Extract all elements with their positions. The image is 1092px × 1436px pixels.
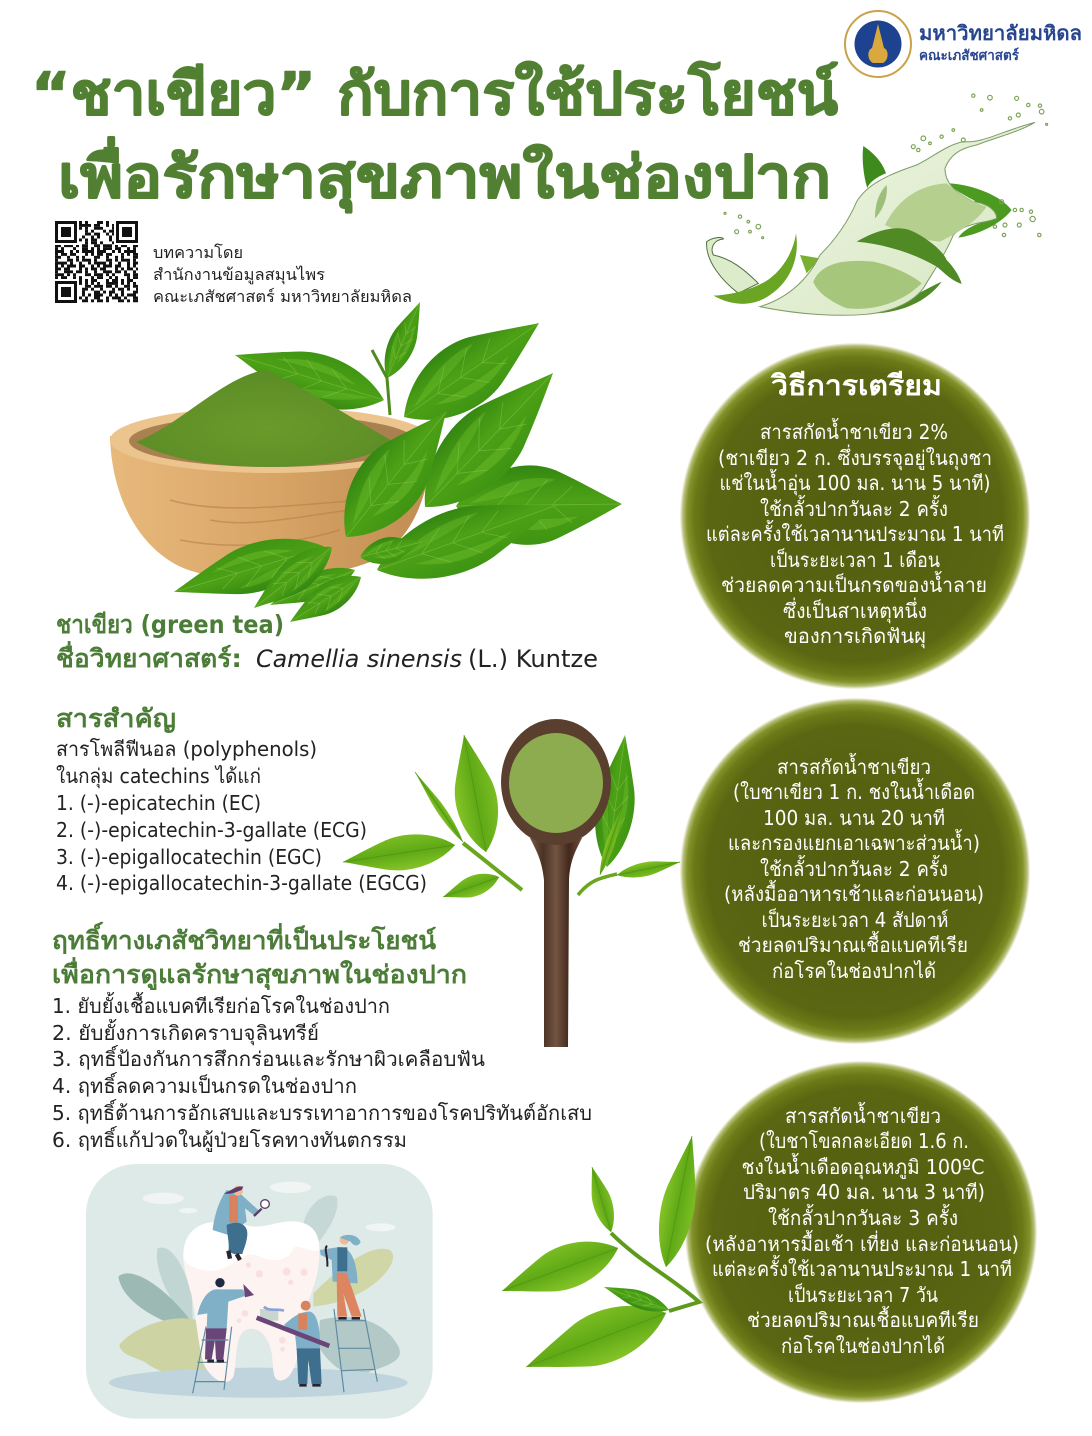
panel: preparation method 2 — [680, 698, 1030, 1044]
dentist on right ladder — [320, 1235, 377, 1392]
article credit — [153, 243, 412, 306]
benefits list: 3. ฤทธิ์ป้องกันการสึกกร่อนและรักษาผิวเคลือบฟัน — [52, 1044, 485, 1071]
plant name — [56, 610, 598, 673]
tooth — [183, 1221, 319, 1382]
panel: preparation method 1: ใช้กลั้วปากวันละ 2 ครั้ง — [760, 495, 948, 521]
key compounds text: 3. (-)-epigallocatechin (EGC) — [56, 845, 322, 869]
title — [31, 59, 839, 214]
panel: preparation method 2: (หลังมื้ออาหารเช้าและก่อนนอน) — [724, 880, 984, 906]
photo: tea sprig beside third panel — [494, 1133, 708, 1391]
panel: preparation method 1: แต่ละครั้งใช้เวลานานประมาณ 1 นาที — [706, 520, 1004, 546]
spoon — [501, 719, 611, 1047]
illustration: dentists caring for a giant tooth — [86, 1164, 433, 1419]
key compounds text: 2. (-)-epicatechin-3-gallate (ECG) — [56, 818, 367, 842]
panel: preparation method 3: เป็นระยะเวลา 7 วัน — [788, 1282, 938, 1307]
benefits heading: เพื่อการดูแลรักษาสุขภาพในช่องปาก — [52, 957, 467, 991]
panel: preparation method 2: เป็นระยะเวลา 4 สัปดาห์ — [762, 907, 948, 932]
plant name: ชื่อวิทยาศาสตร์: — [56, 641, 242, 673]
plant name: Camellia sinensis — [256, 645, 462, 673]
photo: bowl of matcha powder and tea leaves — [110, 296, 622, 634]
plant name: (L.) Kuntze — [468, 645, 598, 673]
title: “ชาเขียว” กับการใช้ประโยชน์ — [31, 59, 839, 128]
key compounds text: 1. (-)-epicatechin (EC) — [56, 791, 261, 815]
panel: preparation method 3: สารสกัดน้ำชาเขียว — [785, 1102, 941, 1128]
panel: preparation method 1: เป็นระยะเวลา 1 เดือน — [770, 547, 940, 572]
panel: preparation method 2: 100 มล. นาน 20 นาที — [763, 806, 945, 830]
panel: preparation method 3 — [685, 1061, 1037, 1403]
benefits heading — [52, 921, 467, 991]
article credit: คณะเภสัชศาสตร์ มหาวิทยาลัยมหิดล — [153, 287, 412, 306]
benefits list: 5. ฤทธิ์ต้านการอักเสบและบรรเทาอาการของโรคปริทันต์อักเสบ — [52, 1098, 592, 1125]
panel: preparation method 3: ปริมาตร 40 มล. นาน 3 นาที) — [743, 1180, 985, 1204]
panel: preparation method 1: ซึ่งเป็นสาเหตุหนึ่ง — [783, 597, 927, 624]
university logo: มหาวิทยาลัยมหิดล — [919, 21, 1082, 45]
panel: preparation method 3: ใช้กลั้วปากวันละ 3 ครั้ง — [768, 1204, 958, 1230]
article credit: บทความโดย — [153, 243, 243, 262]
panel: preparation method 2: ก่อโรคในช่องปากได้ — [772, 959, 936, 983]
dentist with toothbrush — [257, 1301, 329, 1385]
plant name: ชาเขียว (green tea) — [56, 610, 284, 639]
panel: preparation method 2: (ใบชาเขียว 1 ก. ชงในน้ำเดือด — [733, 778, 975, 804]
panel: preparation method 1: (ชาเขียว 2 ก. ซึ่งบรรจุอยู่ในถุงชา — [718, 444, 992, 471]
panel: preparation method 3: ชงในน้ำเดือดอุณหภูมิ 100ºC — [742, 1153, 984, 1180]
photo: wooden spoon with matcha and leaves — [340, 719, 681, 1047]
key compounds text: ในกลุ่ม catechins ได้แก่ — [56, 764, 261, 789]
university logo — [845, 11, 1082, 77]
panel: preparation method 1 — [680, 343, 1030, 689]
heading: preparation method: วิธีการเตรียม — [770, 369, 942, 402]
benefits list: 6. ฤทธิ์แก้ปวดในผู้ป่วยโรคทางทันตกรรม — [52, 1125, 407, 1153]
key compounds text — [56, 704, 427, 895]
panel: preparation method 3: (หลังอาหารมื้อเช้า เที่ยง และก่อนนอน) — [705, 1230, 1019, 1256]
dentist on left ladder — [193, 1278, 254, 1393]
panel: preparation method 3: ก่อโรคในช่องปากได้ — [781, 1334, 945, 1358]
university logo: คณะเภสัชศาสตร์ — [919, 47, 1019, 64]
panel: preparation method 1: แช่ในน้ำอุ่น 100 มล. นาน 5 นาที) — [720, 469, 990, 496]
key compounds text: 4. (-)-epigallocatechin-3-gallate (EGCG) — [56, 871, 427, 895]
panel: preparation method 1: ของการเกิดฟันผุ — [784, 624, 926, 649]
panel: preparation method 2: และกรองแยกเอาเฉพาะส่วนน้ำ) — [728, 829, 980, 855]
matcha powder mound — [136, 370, 394, 467]
panel: preparation method 2: ใช้กลั้วปากวันละ 2 ครั้ง — [760, 855, 948, 881]
wooden bowl — [110, 407, 432, 579]
benefits list: 4. ฤทธิ์ลดความเป็นกรดในช่องปาก — [52, 1071, 357, 1098]
benefits heading: ฤทธิ์ทางเภสัชวิทยาที่เป็นประโยชน์ — [52, 921, 436, 955]
panel: preparation method 3: ช่วยลดปริมาณเชื้อแบคทีเรีย — [747, 1306, 979, 1332]
panel: preparation method 3: แต่ละครั้งใช้เวลานานประมาณ 1 นาที — [712, 1255, 1012, 1281]
panel: preparation method 3: (ใบชาโขลกละเอียด 1.6 ก. — [759, 1129, 969, 1153]
benefits list: 1. ยับยั้งเชื้อแบคทีเรียก่อโรคในช่องปาก — [52, 992, 390, 1018]
article credit: สำนักงานข้อมูลสมุนไพร — [153, 265, 325, 285]
QR code — [55, 221, 138, 303]
panel: preparation method 2: ช่วยลดปริมาณเชื้อแบคทีเรีย — [738, 931, 968, 957]
icon: water splash with leaves — [707, 94, 1048, 315]
key compounds text: สารสำคัญ — [56, 704, 176, 733]
panel: preparation method 2: สารสกัดน้ำชาเขียว — [777, 753, 931, 779]
benefits list — [52, 992, 592, 1153]
sitting dentist with magnifier — [213, 1186, 269, 1260]
key compounds text: สารโพลีฟีนอล (polyphenols) — [56, 737, 317, 761]
title: เพื่อรักษาสุขภาพในช่องปาก — [58, 136, 831, 214]
panel: preparation method 1: ช่วยลดความเป็นกรดของน้ำลาย — [721, 571, 987, 597]
panel: preparation method 1: สารสกัดน้ำชาเขียว 2% — [760, 418, 948, 444]
benefits list: 2. ยับยั้งการเกิดคราบจุลินทรีย์ — [52, 1019, 319, 1046]
